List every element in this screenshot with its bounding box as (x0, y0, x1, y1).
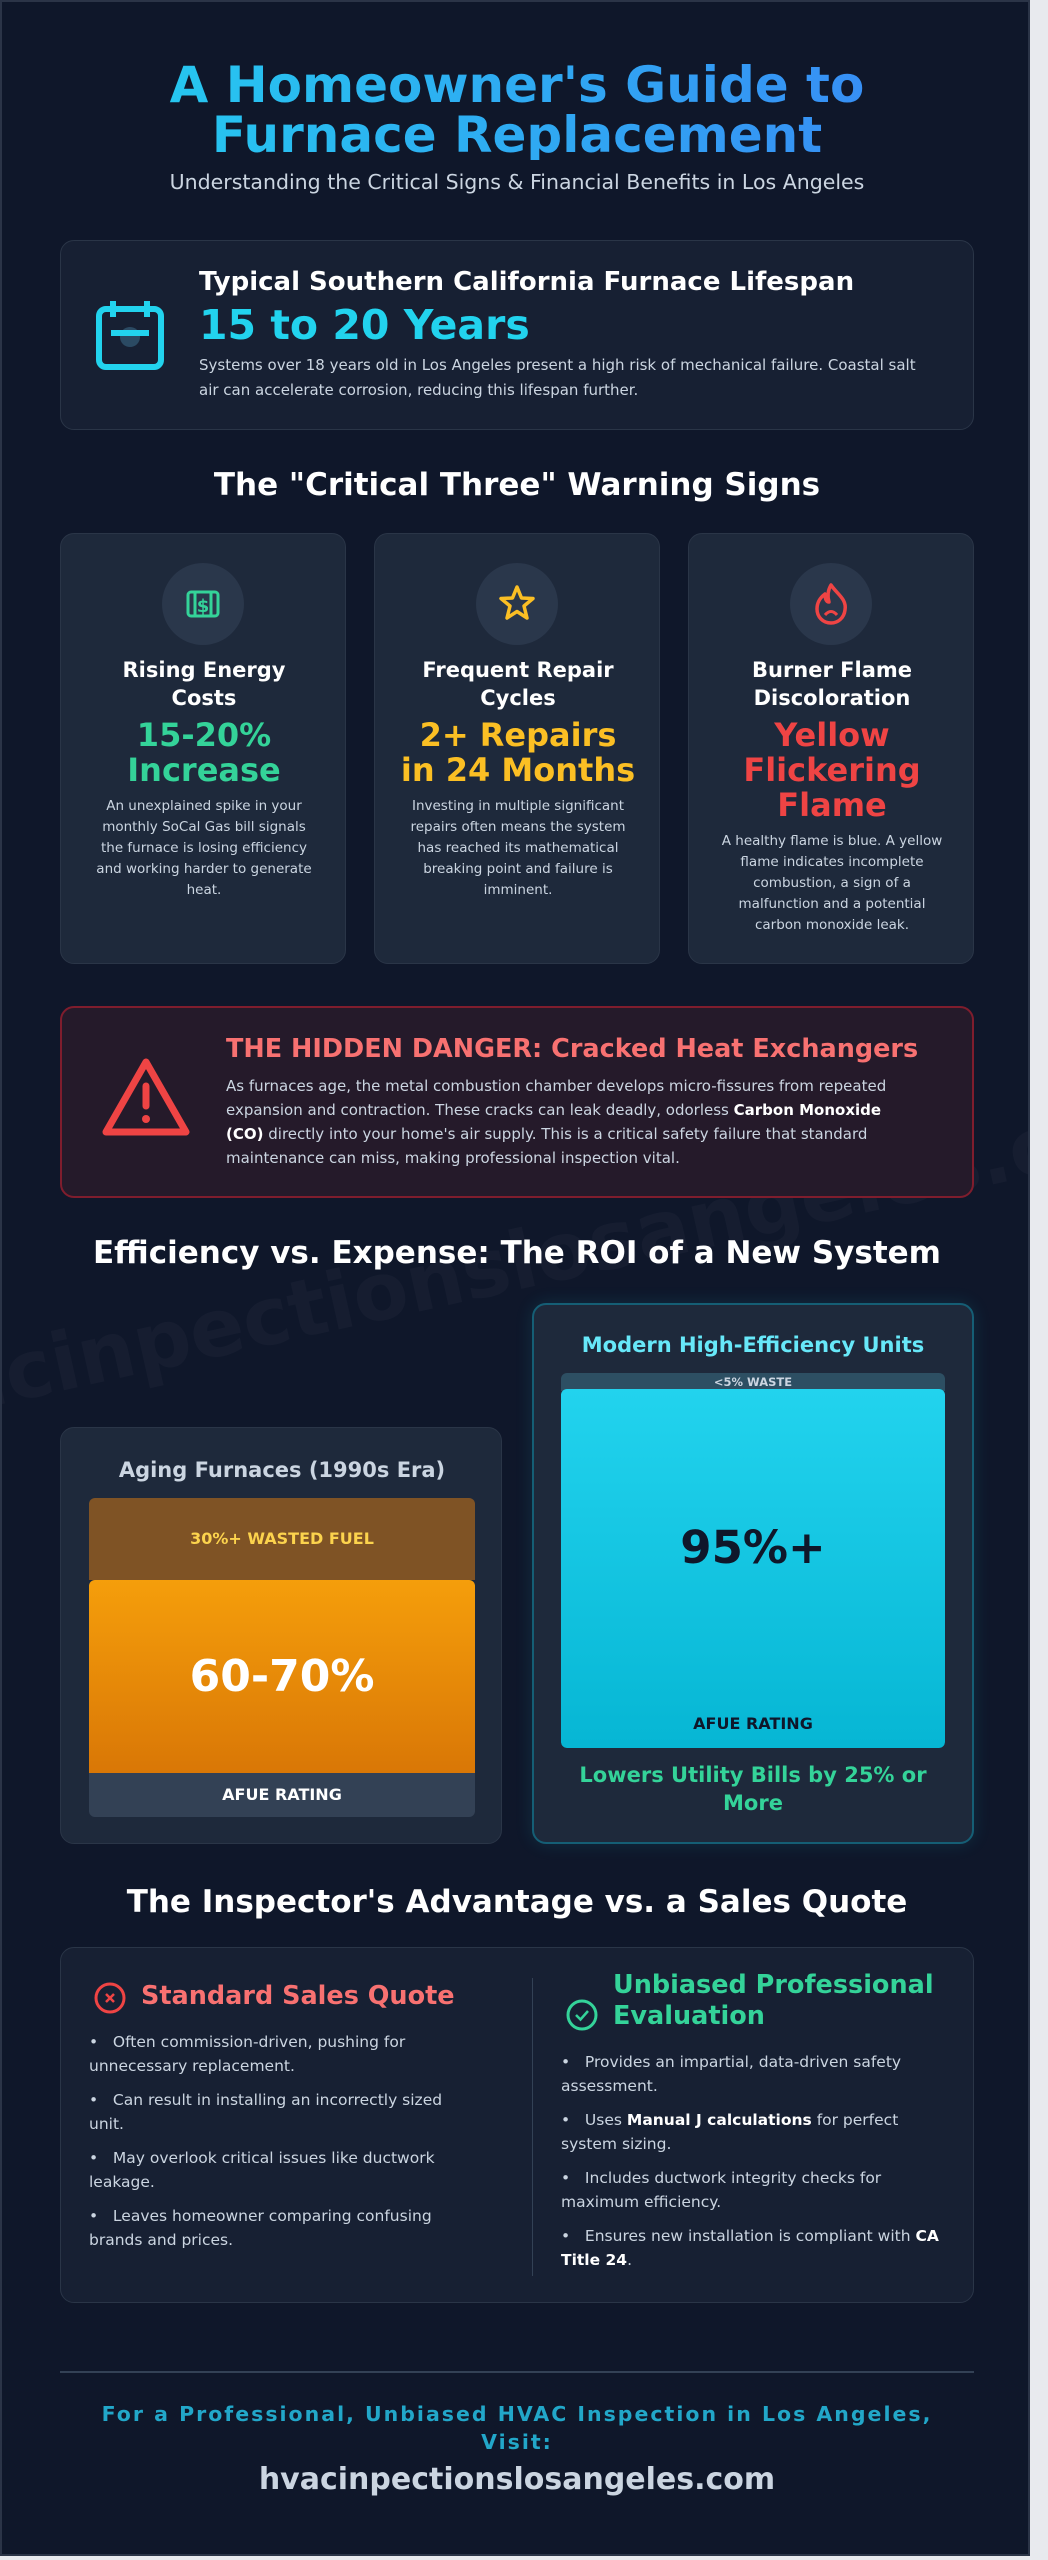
title: Aging Furnaces (1990s Era) (119, 1458, 445, 1482)
icon: x (94, 1982, 126, 2014)
panel: hidden danger (60, 1006, 974, 1198)
title: Cycles (480, 686, 556, 710)
icon: star (476, 563, 558, 645)
efficient segment: 95%+ (680, 1521, 826, 1574)
text: combustion, a sign of a (753, 875, 911, 891)
list: • May overlook critical issues like ductwork (89, 2149, 435, 2167)
text: has reached its mathematical (418, 840, 618, 856)
text: expansion and contraction. These cracks can leak deadly, odorless Carbon Monoxide (226, 1101, 881, 1119)
efficient segment: 60-70% (190, 1651, 374, 1702)
panel: repairs (374, 533, 660, 964)
text: Investing in multiple significant (412, 798, 624, 814)
list (89, 2033, 442, 2249)
title (122, 658, 285, 710)
text: the furnace is losing efficiency (101, 840, 307, 856)
list: unnecessary replacement. (89, 2057, 295, 2075)
list: system sizing. (561, 2135, 671, 2153)
label (89, 1773, 475, 1817)
text: As furnaces age, the metal combustion chamber develops micro-fissures from repeated (226, 1077, 886, 1095)
panel: comparison (60, 1947, 974, 2303)
title (2, 60, 1032, 160)
panel: lifespan (60, 240, 974, 430)
list: brands and prices. (89, 2231, 233, 2249)
text: carbon monoxide leak. (755, 917, 909, 933)
stat: years: 15 to 20 Years (199, 301, 530, 349)
icon: money (162, 563, 244, 645)
stat: Increase (127, 751, 281, 789)
text: flame indicates incomplete (740, 854, 924, 870)
stat: 15-20% (137, 716, 271, 754)
efficient segment (561, 1389, 945, 1748)
text: maintenance can miss, making professional inspection vital. (226, 1149, 680, 1167)
list: • Uses Manual J calculations for perfect (561, 2111, 898, 2129)
title: Burner Flame (752, 658, 912, 682)
title (752, 658, 912, 710)
text: A healthy flame is blue. A yellow (722, 833, 942, 849)
text: monthly SoCal Gas bill signals (102, 819, 306, 835)
callout: savings: Lowers Utility Bills by 25% or More (579, 1763, 927, 1815)
text (96, 798, 312, 898)
title (613, 1970, 934, 2031)
heading: inspector: The Inspector's Advantage vs. a Sales Quote (127, 1884, 907, 1920)
list: maximum efficiency. (561, 2193, 721, 2211)
bar chart: aging (89, 1498, 475, 1817)
waste segment (561, 1373, 945, 1391)
stat: 2+ Repairs (420, 716, 616, 754)
list: assessment. (561, 2077, 658, 2095)
label: AFUE RATING (222, 1785, 342, 1804)
list: • Provides an impartial, data-driven safety (561, 2053, 901, 2071)
title: A Homeowner's Guide to (170, 56, 864, 114)
title: Costs (172, 686, 236, 710)
title: Modern High-Efficiency Units (582, 1333, 924, 1357)
list: • Ensures new installation is compliant with CA (561, 2227, 939, 2245)
panel: energy costs (60, 533, 346, 964)
efficient segment: AFUE RATING (693, 1714, 813, 1733)
list: • Often commission-driven, pushing for (89, 2033, 405, 2051)
panel: modern units (532, 1303, 974, 1844)
icon: warning (102, 1058, 190, 1136)
text: An unexplained spike in your (106, 798, 302, 814)
waste segment: <5% WASTE (714, 1375, 792, 1389)
stat: Flickering (743, 751, 921, 789)
text: imminent. (484, 882, 552, 898)
title: Unbiased Professional (613, 1970, 934, 2000)
waste segment: 30%+ WASTED FUEL (190, 1529, 374, 1548)
footer: url: hvacinpectionslosangeles.com (259, 2462, 775, 2497)
text: breaking point and failure is (423, 861, 613, 877)
text: malfunction and a potential (739, 896, 925, 912)
text: lifespan desc: Systems over 18 years old in Los Angeles present a high risk of mechanical failure. Coastal salt (199, 356, 916, 374)
title: Discoloration (754, 686, 910, 710)
title: Standard Sales Quote (141, 1981, 455, 2011)
title: Rising Energy (122, 658, 285, 682)
panel: aging furnaces (60, 1427, 502, 1844)
stat (401, 716, 635, 789)
title: Frequent Repair (422, 658, 614, 682)
waste segment (89, 1498, 475, 1580)
text (722, 833, 942, 933)
efficient segment (89, 1580, 475, 1773)
list: • Includes ductwork integrity checks for (561, 2169, 881, 2187)
list: unit. (89, 2115, 124, 2133)
list: • Leaves homeowner comparing confusing (89, 2207, 432, 2225)
text: repairs often means the system (410, 819, 626, 835)
text: (CO) directly into your home's air supply. This is a critical safety failure that standard (226, 1125, 867, 1143)
text (226, 1077, 886, 1167)
text (410, 798, 626, 898)
heading: THE HIDDEN DANGER: Cracked Heat Exchangers (226, 1034, 918, 1064)
stat (743, 716, 921, 824)
list: • Can result in installing an incorrectly sized (89, 2091, 442, 2109)
column: sales quote (89, 1981, 455, 2249)
stat (127, 716, 281, 789)
list (561, 2053, 939, 2269)
list: Title 24. (561, 2251, 632, 2269)
bar chart: modern (561, 1373, 945, 1748)
text: lifespan desc: air can accelerate corrosion, reducing this lifespan further. (199, 381, 638, 399)
divider (532, 1978, 533, 2276)
icon: check (566, 2000, 598, 2030)
list: leakage. (89, 2173, 155, 2191)
text: lifespan desc (199, 356, 916, 399)
icon: money: $ (197, 596, 209, 617)
subtitle: Understanding the Critical Signs & Financial Benefits in Los Angeles (170, 170, 864, 194)
panel: flame (688, 533, 974, 964)
heading: warning signs: The "Critical Three" Warning Signs (214, 467, 820, 503)
text: and working harder to generate (96, 861, 312, 877)
footer: call to action: For a Professional, Unbiased HVAC Inspection in Los Angeles, Visit: (102, 2402, 932, 2454)
title: Furnace Replacement (212, 106, 822, 164)
icon: calendar (96, 301, 164, 370)
stat: Yellow (774, 716, 890, 754)
title: Evaluation (613, 2001, 765, 2031)
stat: in 24 Months (401, 751, 635, 789)
text: heat. (187, 882, 221, 898)
heading: ROI: Efficiency vs. Expense: The ROI of a New System (93, 1235, 941, 1271)
heading: lifespan: Typical Southern California Furnace Lifespan (199, 267, 854, 297)
icon: flame (790, 563, 872, 645)
stat: Flame (777, 786, 887, 824)
title (422, 658, 614, 710)
column: professional (561, 1970, 939, 2269)
